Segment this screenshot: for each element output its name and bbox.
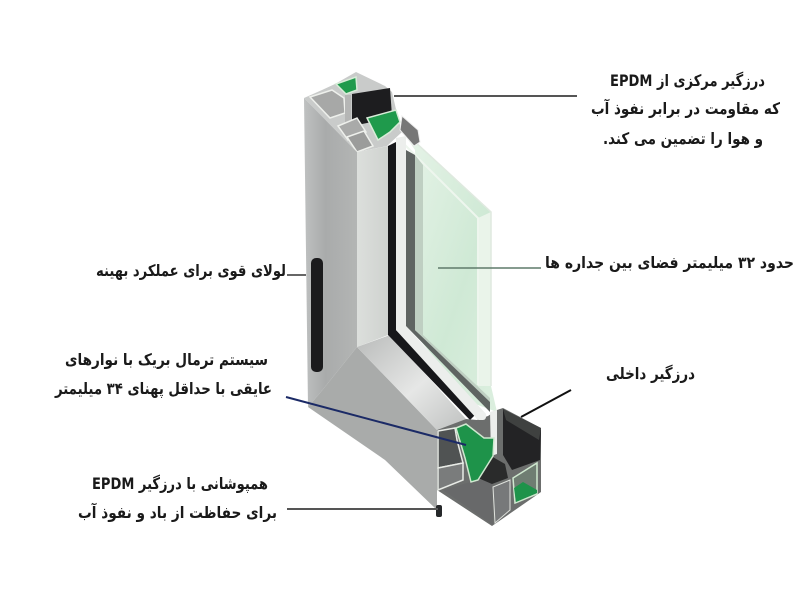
leader line: glass gap — [438, 267, 541, 269]
dark inner strip — [406, 150, 490, 412]
label: thermal break: سیستم ترمال بریک با نوارهای — [65, 350, 268, 369]
green gasket centre — [367, 110, 400, 140]
leader line: hinge — [287, 274, 306, 276]
label: thermal break: عایقی با حداقل پهنای ۳۴ میلیمتر — [54, 379, 272, 399]
label: EPDM overlap — [78, 474, 277, 522]
corner seal detail — [436, 505, 442, 517]
hinge handle — [311, 258, 323, 372]
leader line: EPDM overlap — [287, 508, 438, 510]
green gasket lower right — [513, 463, 537, 503]
glass panes — [400, 128, 497, 412]
sill top face — [357, 335, 466, 430]
label: central EPDM gasket — [591, 71, 781, 148]
label: central EPDM gasket: درزگیر مرکزی از EPDM — [610, 71, 765, 90]
leader line: central gasket — [394, 95, 577, 97]
bottom section profile — [437, 408, 541, 526]
green gasket top — [336, 77, 357, 94]
leader line: thermal break — [286, 397, 466, 445]
inner vertical face — [357, 146, 388, 347]
pale glass edge — [415, 155, 490, 402]
left outer face — [304, 98, 357, 407]
green gasket lower left — [456, 424, 494, 482]
black gasket — [388, 142, 476, 420]
label: central EPDM gasket: و هوا را تضمین می کند. — [603, 129, 763, 148]
window profile illustration — [304, 72, 541, 526]
label: hinge: لولای قوی برای عملکرد بهینه — [96, 261, 286, 280]
top section profile — [304, 72, 420, 152]
leader line: inner gasket — [521, 390, 571, 417]
label: thermal break — [54, 350, 272, 399]
label: EPDM overlap: برای حفاظت از باد و نفوذ آب — [78, 502, 277, 522]
white glazing bead — [396, 136, 486, 420]
label: glass gap: حدود ۳۲ میلیمتر فضای بین جداره ها — [545, 253, 794, 272]
label: inner gasket: درزگیر داخلی — [606, 364, 695, 383]
label: EPDM overlap: همپوشانی با درزگیر EPDM — [92, 474, 268, 494]
black inner gasket — [503, 409, 541, 470]
lower slope face — [308, 347, 437, 510]
